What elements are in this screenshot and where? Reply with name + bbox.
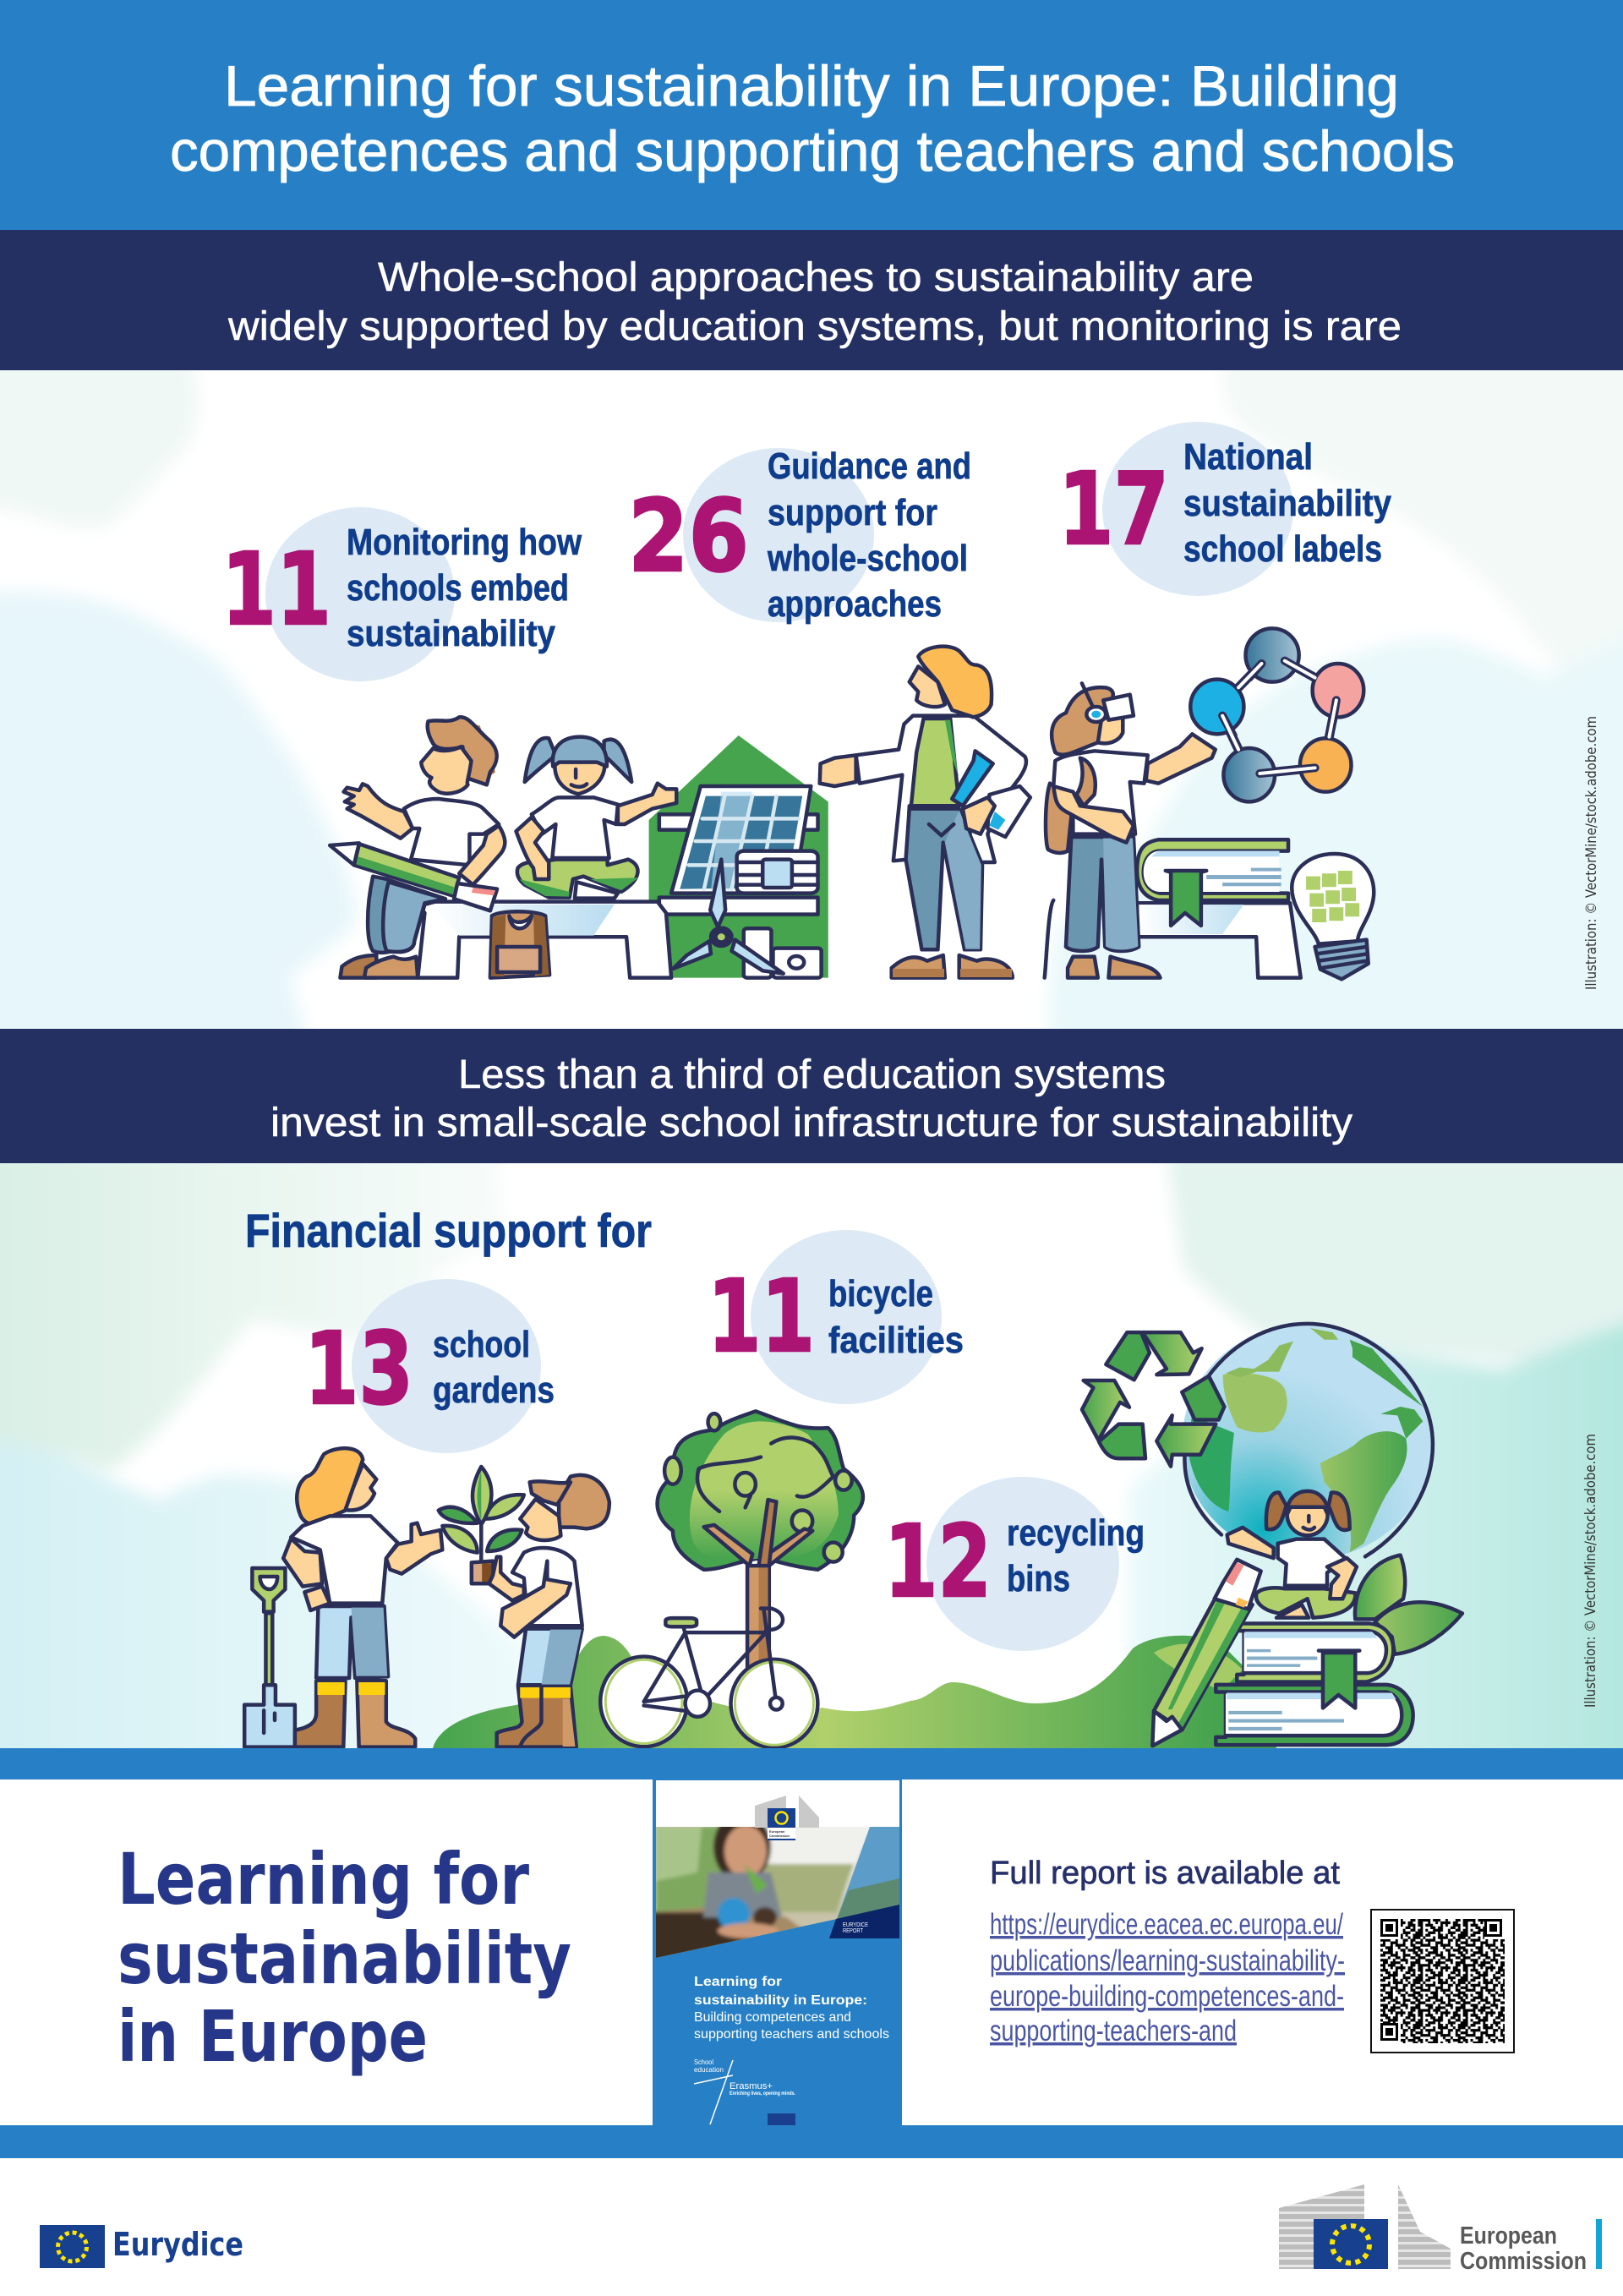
teacher [820, 647, 1030, 978]
boy with pencil [330, 717, 505, 978]
globe [1182, 1324, 1433, 1560]
report title [117, 1838, 571, 2078]
illustration: tree and bicycle [600, 1411, 863, 1748]
stat: school gardens [304, 1279, 555, 1453]
stat: labels: school labels [1183, 528, 1382, 570]
section heading: whole-school approaches: Whole-school approaches to sustainability are [378, 255, 1254, 300]
stacked books [1216, 1624, 1413, 1745]
stat: guidance: approaches [768, 583, 942, 625]
report link: https://eurydice.eacea.ec.europa.eu/ [990, 1908, 1343, 1941]
green hills [433, 1636, 1276, 1748]
section heading: infrastructure: invest in small-scale school infrastructure for sustainability [270, 1101, 1352, 1145]
panel: financial support [0, 1150, 1623, 1767]
full report block: Full report is available at [990, 1856, 1340, 1891]
illustration: recycling, globe, girl on books [1082, 1324, 1462, 1746]
cover EC logo: Commission [769, 1834, 790, 1838]
stat: recycling bins [884, 1477, 1145, 1651]
girl with pigtails [516, 737, 676, 899]
European Commission logo: Commission [1460, 2248, 1587, 2275]
report link [990, 1908, 1345, 2047]
stat: bicycle facilities: 11 [708, 1258, 815, 1375]
bicycle [600, 1609, 817, 1748]
blue band below report block [0, 2125, 1623, 2158]
stat: labels: National [1183, 436, 1313, 478]
stat: school gardens: gardens [433, 1369, 555, 1411]
stat: guidance: Guidance and [768, 446, 971, 487]
section heading: whole-school approaches: widely supported by education systems, but monitoring is rare [227, 304, 1402, 349]
report cover [651, 1779, 902, 2125]
stat: bicycle facilities: bicycle [828, 1273, 933, 1315]
cover text: Erasmus+ [730, 2081, 773, 2091]
illustration: teacher, student and molecule [820, 628, 1374, 979]
heading: financial support for: Financial support for [245, 1204, 652, 1257]
molecule [1190, 628, 1363, 801]
bench [416, 902, 671, 978]
backpack [490, 911, 549, 978]
stat: monitoring: sustainability [347, 613, 555, 654]
cover report tag [843, 1922, 868, 1934]
stat: labels: sustainability [1183, 483, 1391, 524]
stat: monitoring: 11 [221, 531, 331, 648]
green house with solar panel [649, 735, 828, 978]
cover report tag: REPORT [843, 1928, 864, 1934]
gardener with shovel [283, 1448, 442, 1747]
European Commission logo: European [1460, 2222, 1557, 2250]
illustration: students, bench and green house [330, 717, 828, 978]
Eurydice logo [40, 2225, 243, 2268]
cover photo [656, 1827, 899, 1958]
cover EC logo [755, 1796, 819, 1840]
stat: guidance: support for [768, 492, 937, 533]
stat: guidance: 26 [628, 478, 749, 594]
title text: Learning for sustainability in Europe: Building [224, 54, 1399, 118]
report title: in Europe [117, 1995, 428, 2078]
cover report tag: EURYDICE [843, 1922, 868, 1928]
European Commission logo [1279, 2184, 1602, 2275]
cover text [694, 1975, 889, 2125]
cover text: sustainability in Europe: [694, 1993, 867, 2008]
potted seedling [439, 1467, 524, 1583]
report link: europe-building-competences-and- [990, 1980, 1344, 2013]
cover text: Enriching lives, opening minds. [730, 2091, 795, 2096]
stat: guidance [628, 446, 971, 625]
stat: recycling bins: recycling [1007, 1512, 1145, 1554]
wind turbine [673, 860, 784, 974]
blue band above report block [0, 1748, 1623, 1779]
light bulb [1292, 854, 1374, 979]
recycling symbol [1082, 1332, 1224, 1467]
illustration: gardeners [244, 1448, 609, 1747]
report title: sustainability [117, 1917, 571, 2000]
tree [658, 1411, 863, 1670]
QR code [1371, 1910, 1514, 2053]
pencil [1152, 1560, 1261, 1746]
title banner [0, 0, 1623, 230]
stat: recycling bins: bins [1007, 1558, 1070, 1599]
full report block [990, 1856, 1514, 2053]
stat: monitoring: schools embed [347, 567, 569, 609]
stat: bicycle facilities: facilities [828, 1320, 964, 1361]
watercolour background 2 [0, 1150, 1623, 1767]
cover text: Building competences and [694, 2010, 851, 2025]
watercolour background 1 [0, 355, 1623, 1048]
stat: labels [1058, 422, 1391, 596]
cover text: education [694, 2066, 724, 2074]
cover text: Learning for [694, 1975, 782, 1989]
title text [170, 54, 1455, 183]
stat: bicycle facilities [708, 1230, 964, 1404]
report link: publications/learning-sustainability- [990, 1944, 1345, 1977]
stat: labels: 17 [1058, 451, 1169, 567]
stat: monitoring [221, 507, 582, 681]
cover text: School [694, 2058, 713, 2066]
report link: supporting-teachers-and [990, 2014, 1237, 2047]
book and bench [1045, 839, 1301, 978]
panel: whole-school approaches [0, 355, 1623, 1048]
section heading: infrastructure [0, 1029, 1623, 1163]
illustration credit 2: Illustration: © VectorMine/stock.adobe.com [1582, 1434, 1599, 1708]
Eurydice logo: Eurydice [112, 2226, 243, 2263]
title text: competences and supporting teachers and schools [170, 119, 1455, 183]
girl with ponytail [489, 1475, 609, 1747]
section heading: whole-school approaches [0, 230, 1623, 370]
cover EC logo: European [769, 1829, 785, 1834]
stat: school gardens: 13 [304, 1310, 413, 1427]
stat: recycling bins: 12 [884, 1503, 992, 1620]
girl on books [1227, 1491, 1357, 1618]
stat: monitoring: Monitoring how [347, 522, 582, 563]
stat: school gardens: school [433, 1324, 530, 1365]
shovel [244, 1568, 295, 1747]
student with VR headset [1046, 683, 1216, 978]
leaves [1355, 1555, 1462, 1654]
illustration credit 1: Illustration: © VectorMine/stock.adobe.com [1583, 716, 1600, 990]
cover text: supporting teachers and schools [694, 2027, 889, 2042]
report title: Learning for [117, 1838, 529, 1921]
stat: guidance: whole-school [767, 538, 968, 579]
section heading: infrastructure: Less than a third of education systems [458, 1052, 1166, 1097]
